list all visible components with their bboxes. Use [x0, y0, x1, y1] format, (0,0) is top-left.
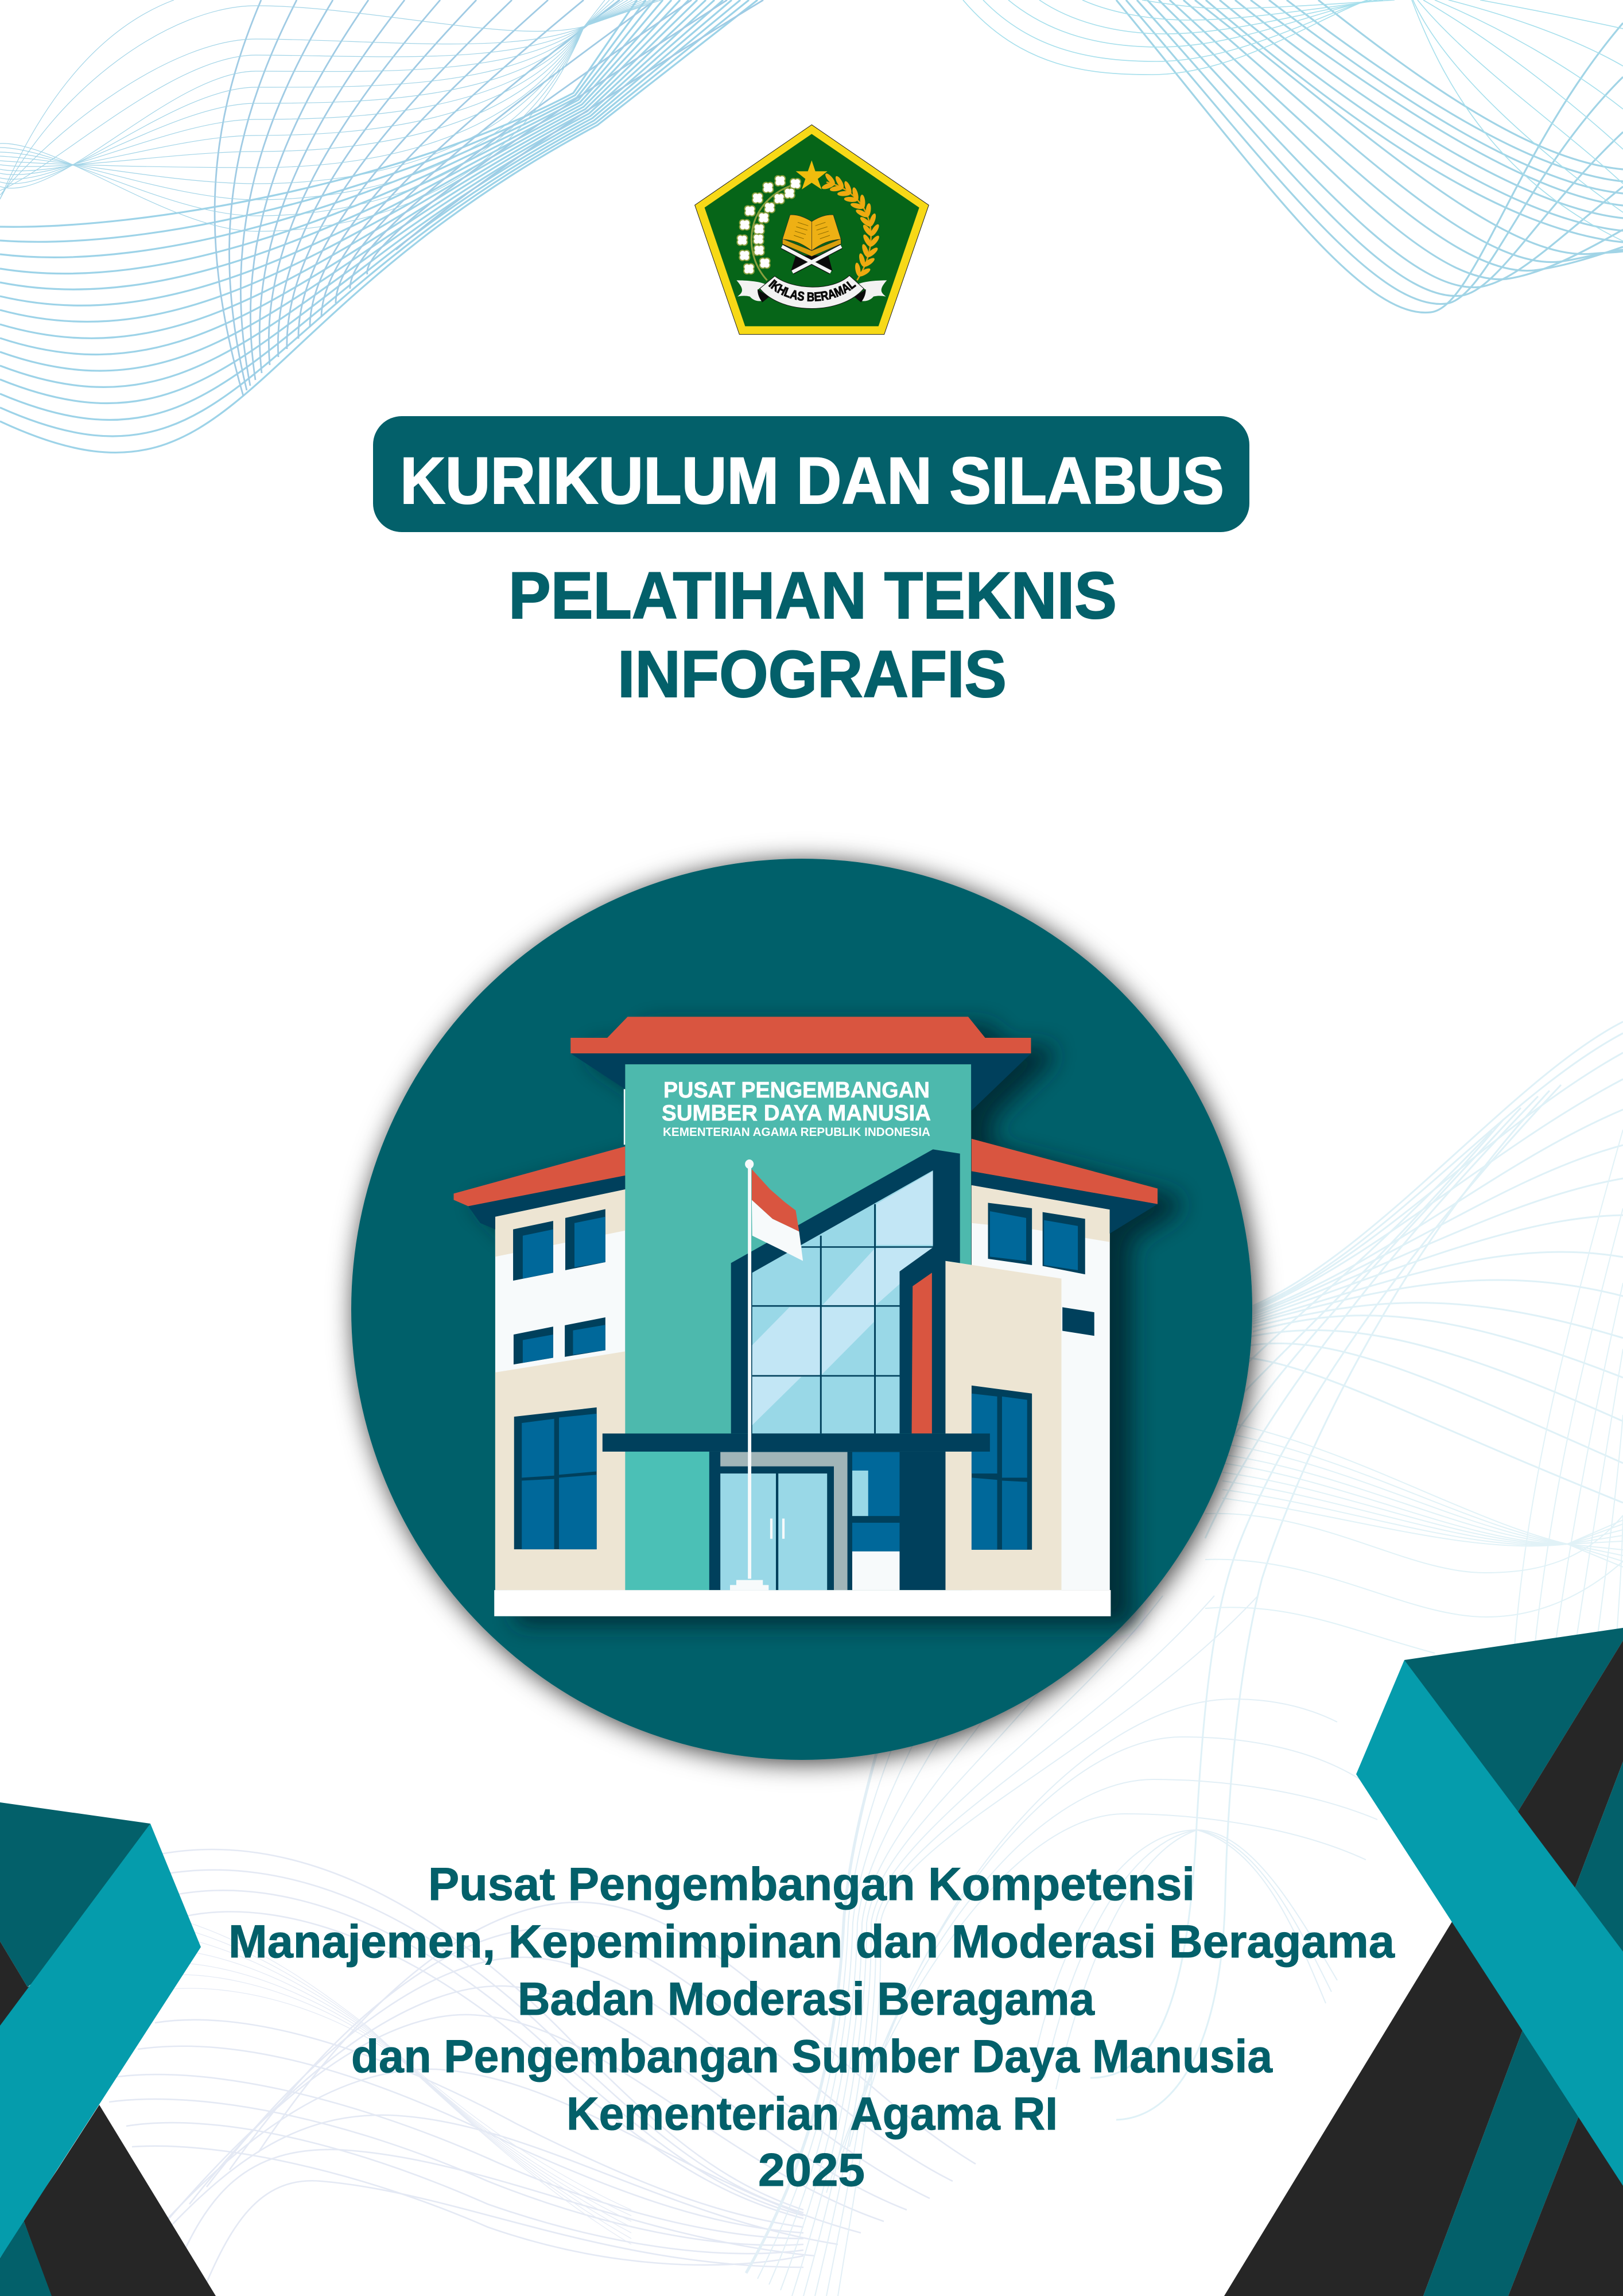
- institution text block: 2025: [758, 2144, 865, 2196]
- icon: cotton branch: [736, 175, 801, 280]
- subtitle: Pelatihan Teknis Infografis: INFOGRAFIS: [618, 638, 1007, 711]
- building signage text: SUMBER DAYA MANUSIA: [662, 1101, 931, 1126]
- icon: star: [796, 160, 828, 189]
- entrance doors: [709, 1452, 945, 1590]
- institution text block: Pusat Pengembangan Kompetensi: [428, 1859, 1195, 1910]
- title banner: KURIKULUM DAN SILABUS: [373, 416, 1249, 532]
- building signage text: KEMENTERIAN AGAMA REPUBLIK INDONESIA: [663, 1126, 930, 1139]
- decorative ribbon: bottom right: [1224, 1628, 1623, 2296]
- institution text block: [228, 1859, 1395, 2196]
- top roof: [570, 1017, 1031, 1111]
- icon: open Quran on stand: [782, 215, 841, 272]
- teal circle backdrop: [351, 859, 1252, 1760]
- building signage text: [662, 1078, 931, 1139]
- decorative ribbon: bottom left: [0, 1802, 216, 2296]
- institution text block: Badan Moderasi Beragama: [518, 1973, 1095, 2025]
- subtitle: Pelatihan Teknis Infografis: PELATIHAN TEKNIS: [508, 559, 1117, 633]
- banner: motto ribbon: IKHLAS BERAMAL: [768, 279, 856, 302]
- subtitle: Pelatihan Teknis Infografis: [508, 559, 1117, 711]
- title banner: KURIKULUM DAN SILABUS: KURIKULUM DAN SILABUS: [400, 444, 1224, 518]
- building signage text: PUSAT PENGEMBANGAN: [663, 1078, 930, 1103]
- icon: rice stalk: [821, 172, 881, 280]
- institution text block: Manajemen, Kepemimpinan dan Moderasi Beragama: [228, 1916, 1395, 1968]
- institution text block: Kementerian Agama RI: [566, 2088, 1058, 2140]
- illustration: training center building: [454, 1017, 1158, 1616]
- flag and pole: [730, 1159, 803, 1590]
- institution text block: dan Pengembangan Sumber Daya Manusia: [351, 2031, 1273, 2082]
- building base: [494, 1590, 1111, 1616]
- entrance canopy band: [603, 1433, 990, 1452]
- left wing of building: [454, 1146, 625, 1590]
- central tower: [624, 1064, 971, 1590]
- glass facade: [731, 1149, 960, 1433]
- right wing of building: [972, 1139, 1158, 1590]
- banner: motto ribbon: [736, 276, 887, 309]
- logo: Kementerian Agama emblem: [694, 124, 929, 335]
- front right block with window: [945, 1261, 1061, 1590]
